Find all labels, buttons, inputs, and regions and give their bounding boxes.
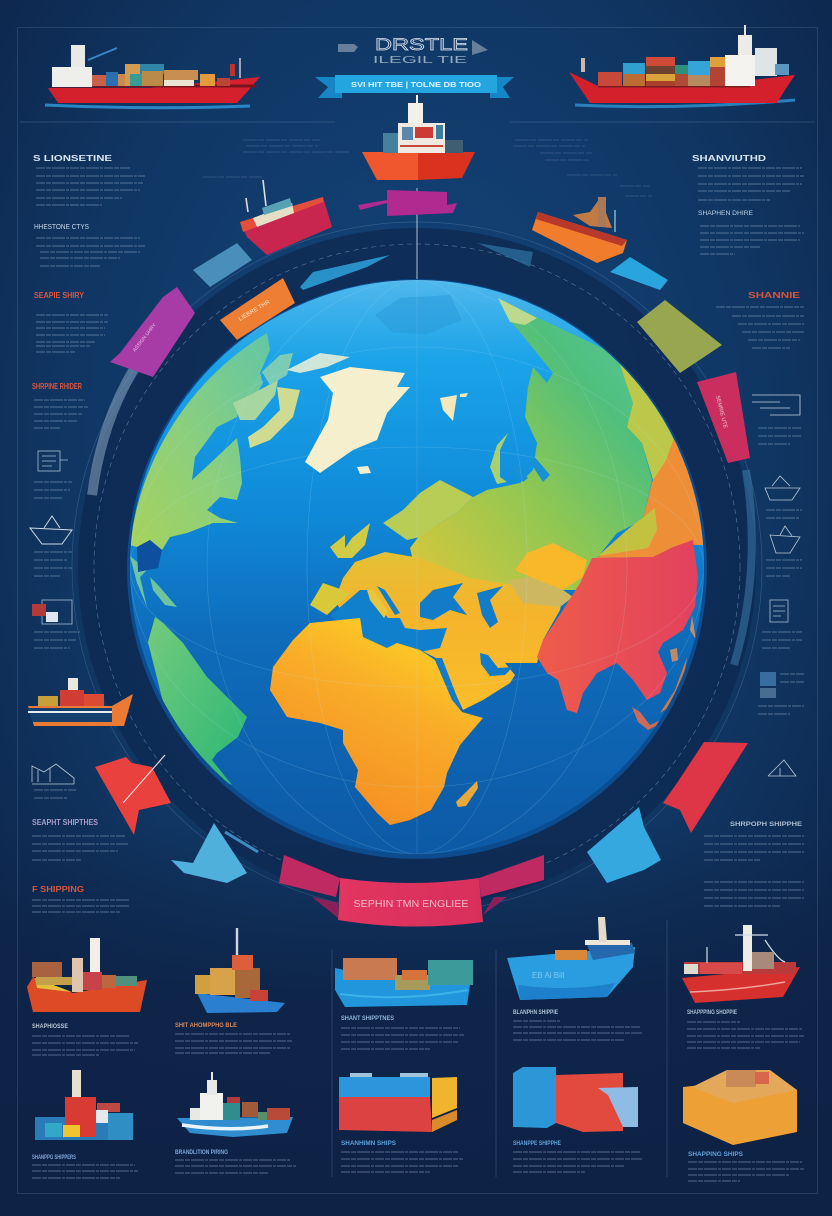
block: caption 6 [32, 1155, 138, 1178]
banner: right olive [637, 300, 722, 373]
block: caption 9: SHANPPE SHIPPHE [513, 1141, 561, 1147]
map: mediterranean [330, 590, 447, 652]
title: DRSTLE [375, 35, 468, 54]
icon: document [38, 451, 68, 471]
block: red heading 4: SHRPINE RHIDER [32, 382, 82, 391]
block: heading 5 [32, 818, 128, 860]
ship: top left [45, 45, 260, 108]
block: heading 5: SEAPHT SHIPTHES [32, 818, 99, 827]
block: caption 7: BRANDLITION PIRING [175, 1150, 228, 1156]
block: notes 2 [34, 552, 72, 576]
block: red heading 3: SEAPIE SHIRY [34, 291, 85, 300]
map: far east orange [597, 430, 705, 558]
block: caption 2: SHIT AHOMPPHG BLE [175, 1022, 238, 1029]
block: red heading 3: SHANNIE [748, 291, 801, 300]
block: heading 1: S LIONSETINE [33, 154, 113, 163]
block: caption 10: SHAPPING SHIPS [688, 1152, 743, 1158]
map: caspian [477, 586, 503, 628]
block: heading 6: F SHIPPING [32, 885, 84, 894]
ship: top right [569, 25, 795, 107]
block: red heading 3 [34, 291, 108, 352]
globe [127, 279, 707, 859]
map: central asia [515, 543, 587, 590]
block: caption 10 [688, 1152, 804, 1181]
banner: top purple [358, 190, 457, 216]
block: notes b [766, 510, 802, 576]
block: heading 1 [33, 154, 145, 205]
banner: bottom centre [279, 855, 544, 927]
map: arctic patch [375, 295, 462, 335]
ship: upper left arc [240, 180, 332, 255]
block: heading [704, 821, 804, 860]
banner: right crimson [697, 372, 750, 463]
graticule [130, 280, 704, 854]
ship: bottom row 4 [507, 917, 635, 1000]
block: caption 7 [175, 1150, 296, 1173]
map: siberian inlets [512, 455, 550, 482]
title [338, 35, 488, 66]
map: black sea [420, 583, 467, 620]
icon: panel [760, 672, 776, 698]
block: notes d [758, 674, 804, 714]
banner: lower right blue [587, 807, 661, 883]
banner: left blue [193, 243, 252, 287]
block: notes 4 [34, 790, 76, 798]
block: caption 8 [341, 1141, 463, 1172]
block: heading 2 [34, 224, 145, 266]
ring around globe [72, 188, 762, 912]
block: heading 1: SHANVIUTHD [692, 154, 766, 163]
block: heading: SHRPOPH SHIPPHE [730, 821, 803, 828]
block: caption 5: SHAPPPING SHOPPIE [687, 1010, 737, 1016]
map: north eurasia [410, 300, 652, 590]
block: caption 9 [513, 1141, 642, 1172]
block: notes c [762, 632, 802, 648]
map: madagascar [456, 781, 478, 807]
banner: right blue [610, 257, 668, 290]
map: adriatic [377, 586, 400, 615]
block: notes 3 [34, 632, 80, 648]
icon: ship outline [30, 516, 72, 544]
ship: upper right arc [532, 197, 627, 263]
ship: bottom row 2 [195, 928, 285, 1013]
map: svalbard [440, 393, 468, 421]
block: red heading 3 [716, 291, 804, 348]
map: persian gulf [480, 653, 513, 676]
map: italy [367, 590, 388, 618]
banner: left orange: LIEBRE THR [238, 299, 272, 323]
map: pale arctic coast [498, 298, 537, 325]
banner: bottom centre: SEPHIN TMN ENGLIEE [354, 899, 469, 910]
block: heading 1 [692, 154, 804, 200]
map: africa [270, 618, 483, 825]
icon: container blue-red [339, 1073, 457, 1132]
block: caption 1: SHAPHIOSSE [32, 1023, 69, 1030]
map: indonesia [632, 707, 660, 730]
map: iceland [357, 466, 371, 474]
map: north america [130, 333, 270, 550]
block: heading 2: SHAPHEN DHIRE [698, 210, 754, 217]
block: notes 1 [34, 482, 72, 498]
faint notes around the centre ship [203, 140, 652, 196]
block: red heading 4 [32, 382, 88, 428]
banner: left magenta: ASSIGN UHRY [132, 322, 158, 353]
map: steppe [508, 577, 573, 607]
ship: bottom row 4: EB Ai Bill [532, 971, 565, 980]
map: europe and west asia [335, 552, 563, 710]
map: british isles [330, 523, 370, 558]
block: caption 2 [175, 1022, 292, 1053]
banner: left magenta [110, 287, 195, 377]
icon: harbor crane [32, 764, 74, 784]
block: caption 4 [513, 1010, 642, 1040]
banner: lower left blue [171, 823, 258, 883]
map: greenland [305, 367, 410, 473]
map: arctic islands [248, 387, 300, 448]
block: caption 3: SHANT SHIPPTNES [341, 1016, 394, 1022]
block: heading 6 [32, 885, 130, 912]
ship: bottom row 5 [682, 925, 800, 1003]
map: scandinavia [383, 480, 473, 540]
right column text [692, 154, 804, 906]
icon: container group [513, 1067, 638, 1132]
banner: right crimson: SEMRIE UTE [714, 395, 728, 429]
block: caption 1 [32, 1023, 138, 1055]
block: notes a [758, 428, 802, 444]
block: caption 3 [341, 1016, 464, 1049]
map: south america [148, 617, 247, 785]
block: caption 4: BLANPHN SHIPPIE [513, 1010, 558, 1016]
ship: bottom row 6 [35, 1070, 133, 1140]
map: gulf [137, 540, 162, 572]
block: heading 2 [698, 210, 804, 254]
ship: bottom row 3 [335, 958, 473, 1007]
block: caption 8: SHANHIMN SHIPS [341, 1141, 396, 1147]
icon: small ships [765, 476, 800, 553]
banner: lower right red [663, 742, 748, 833]
title ribbon: SVI HIT TBE | TOLNE DB TIOO [351, 80, 481, 89]
map: central america [130, 556, 177, 607]
ship: bottom row 7 [177, 1072, 293, 1137]
map: far east olive band [620, 364, 678, 480]
icon: chart [752, 395, 800, 415]
map: novaya zemlya [490, 433, 508, 484]
bottom divider lines [332, 920, 667, 1177]
left column text [28, 154, 145, 912]
banner: left orange [220, 278, 295, 340]
block: caption 6: SHANPPG SHIPPERS [32, 1155, 76, 1161]
map: iberia [310, 583, 350, 615]
title: ILEGIL TIE [373, 55, 468, 66]
block: caption 5 [687, 1010, 804, 1048]
ship: bottom row 1 [27, 938, 147, 1012]
icon: crane [768, 760, 796, 776]
block: lines [704, 882, 804, 906]
banner: lower left red [95, 755, 171, 835]
swoosh: upper ring left [300, 255, 390, 290]
swoosh: upper ring right [477, 243, 533, 267]
map: red sea [435, 658, 462, 710]
icon: container stack [32, 600, 72, 624]
ship: left side [28, 678, 133, 726]
title ribbon [315, 75, 514, 98]
icon: orange cargo [683, 1070, 797, 1145]
ship: top centre [362, 95, 475, 180]
map: south and east asia [537, 540, 698, 713]
icon: document [770, 600, 788, 622]
block: heading 2: HHESTONE CTYS [34, 224, 89, 231]
